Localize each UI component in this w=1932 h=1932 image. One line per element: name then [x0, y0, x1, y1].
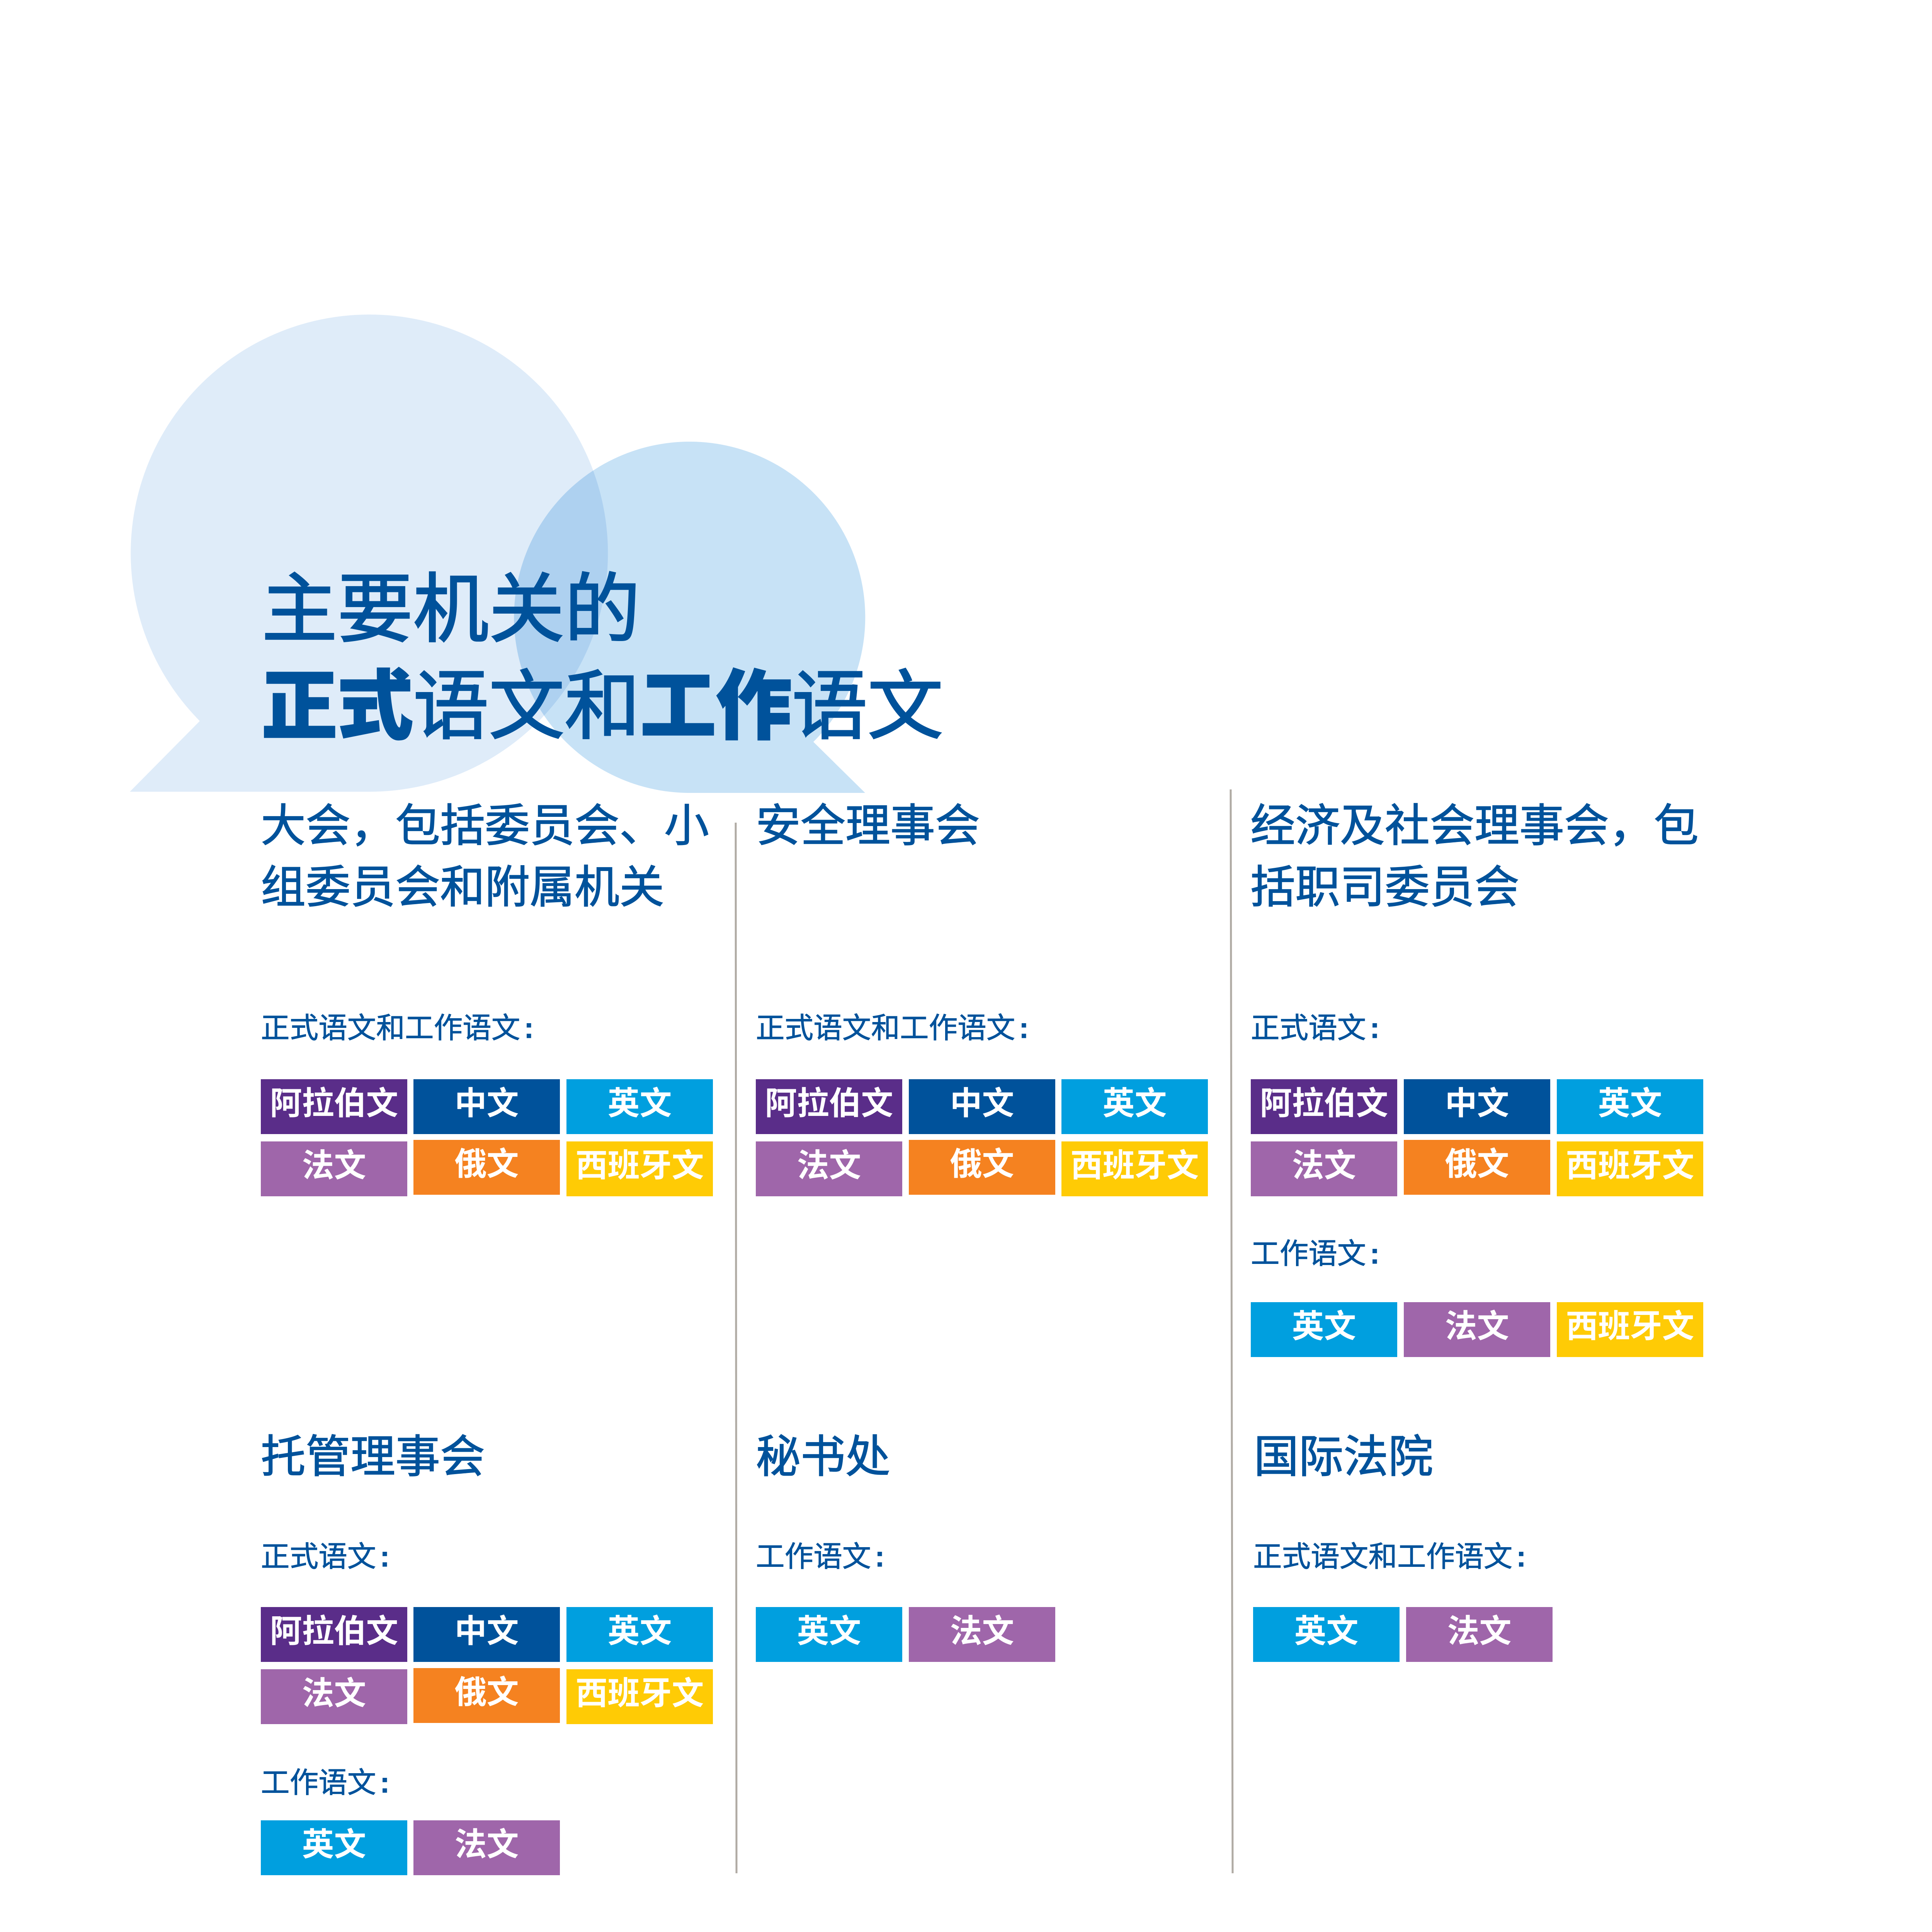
heading: Secretariat: 秘书处	[756, 1432, 890, 1482]
tile: Russian: 俄文	[1445, 1146, 1509, 1182]
tile: English: 英文	[1292, 1308, 1356, 1344]
tile: English: 英文	[607, 1613, 672, 1649]
tile: Chinese	[909, 1079, 1055, 1134]
label: working languages: 工作语文:	[1251, 1237, 1379, 1270]
tile: English: 英文	[1598, 1085, 1662, 1121]
tile: Chinese: 中文	[454, 1085, 519, 1121]
tile: Arabic: 阿拉伯文	[270, 1085, 398, 1121]
tile: Russian	[413, 1140, 560, 1195]
label: official languages: 正式语文:	[1251, 1012, 1379, 1044]
tile: English	[1253, 1607, 1400, 1662]
label: official and working languages: 正式语文和工作语文:	[1253, 1540, 1526, 1573]
tile: French	[413, 1820, 560, 1875]
panel: International Court of Justice	[1253, 1432, 1553, 1662]
tile: Chinese: 中文	[950, 1085, 1014, 1121]
tile: Chinese: 中文	[454, 1613, 519, 1649]
tile: Arabic: 阿拉伯文	[1260, 1085, 1388, 1121]
label: working languages: 工作语文:	[756, 1540, 884, 1573]
tile: English	[566, 1607, 713, 1662]
panel: General Assembly	[261, 801, 713, 1196]
title	[262, 567, 943, 749]
tile: Spanish: 西班牙文	[1070, 1148, 1199, 1184]
tile: Arabic	[261, 1079, 407, 1134]
tile: French: 法文	[1292, 1148, 1356, 1184]
tile: Arabic	[261, 1607, 407, 1662]
title: 正式语文和工作语文	[262, 664, 943, 749]
label: official languages: 正式语文:	[261, 1540, 389, 1573]
tile: French	[756, 1141, 902, 1196]
tile: French: 法文	[797, 1148, 861, 1184]
tile: Arabic: 阿拉伯文	[765, 1085, 893, 1121]
heading: General Assembly: 组委员会和附属机关	[261, 862, 664, 912]
tile: French	[1251, 1141, 1397, 1196]
speech bubbles behind title	[130, 315, 865, 793]
tile: Spanish	[1061, 1141, 1208, 1196]
tile: Chinese	[1404, 1079, 1550, 1134]
tile: French: 法文	[1445, 1308, 1509, 1344]
tile: Chinese	[413, 1079, 560, 1134]
divider: between columns two and three	[1231, 789, 1233, 1873]
tile: French	[1406, 1607, 1553, 1662]
tile: French	[909, 1607, 1055, 1662]
label: working languages: 工作语文:	[261, 1766, 389, 1799]
tile: English	[566, 1079, 713, 1134]
heading: Economic and Social Council: 括职司委员会	[1250, 862, 1519, 912]
title: 主要机关的	[262, 567, 640, 652]
panel: Trusteeship Council	[261, 1432, 713, 1875]
heading: Security Council: 安全理事会	[756, 801, 980, 851]
heading: Economic and Social Council: 经济及社会理事会，包	[1250, 801, 1699, 851]
tile: Russian	[909, 1140, 1055, 1195]
panel: Security Council	[756, 801, 1208, 1196]
tile: Spanish	[566, 1141, 713, 1196]
tile: Spanish	[1557, 1302, 1703, 1357]
tile: Chinese: 中文	[1445, 1085, 1509, 1121]
tile: French: 法文	[950, 1613, 1014, 1649]
tile: French	[261, 1669, 407, 1724]
tile: English	[1251, 1302, 1397, 1357]
tile: English	[261, 1820, 407, 1875]
tile: English	[1061, 1079, 1208, 1134]
tile: Russian: 俄文	[950, 1146, 1014, 1182]
tile: Spanish: 西班牙文	[1566, 1148, 1694, 1184]
tile: Spanish	[1557, 1141, 1703, 1196]
label: official and working languages: 正式语文和工作语文:	[261, 1012, 534, 1044]
heading: General Assembly	[261, 801, 709, 912]
tile: French: 法文	[302, 1148, 366, 1184]
tile: English	[756, 1607, 902, 1662]
tile: Chinese	[413, 1607, 560, 1662]
tile: English: 英文	[797, 1613, 861, 1649]
tile: English: 英文	[607, 1085, 672, 1121]
tile: French: 法文	[454, 1827, 519, 1862]
tile: English: 英文	[1103, 1085, 1167, 1121]
tile: French: 法文	[302, 1675, 366, 1711]
tile: French: 法文	[1447, 1613, 1512, 1649]
heading: Trusteeship Council: 托管理事会	[261, 1432, 485, 1482]
tile: Arabic	[756, 1079, 902, 1134]
tile: Arabic	[1251, 1079, 1397, 1134]
tile: Spanish: 西班牙文	[1566, 1308, 1694, 1344]
tile: Arabic: 阿拉伯文	[270, 1613, 398, 1649]
tile: Spanish: 西班牙文	[576, 1148, 704, 1184]
tile: French	[261, 1141, 407, 1196]
tile: Spanish: 西班牙文	[576, 1675, 704, 1711]
heading: Economic and Social Council	[1250, 801, 1699, 912]
panel: Secretariat	[756, 1432, 1055, 1662]
tile: English	[1557, 1079, 1703, 1134]
tile: English: 英文	[1294, 1613, 1359, 1649]
heading: International Court of Justice: 国际法院	[1254, 1432, 1433, 1482]
heading: General Assembly: 大会，包括委员会、小	[261, 801, 709, 851]
tile: Spanish	[566, 1669, 713, 1724]
tile: English: 英文	[302, 1827, 366, 1862]
panel: Economic and Social Council	[1250, 801, 1703, 1357]
tile: Russian: 俄文	[454, 1146, 519, 1182]
tile: Russian	[1404, 1140, 1550, 1195]
tile: French	[1404, 1302, 1550, 1357]
tile: Russian: 俄文	[454, 1674, 519, 1710]
label: official and working languages: 正式语文和工作语文:	[756, 1012, 1029, 1044]
tile: Russian	[413, 1668, 560, 1723]
